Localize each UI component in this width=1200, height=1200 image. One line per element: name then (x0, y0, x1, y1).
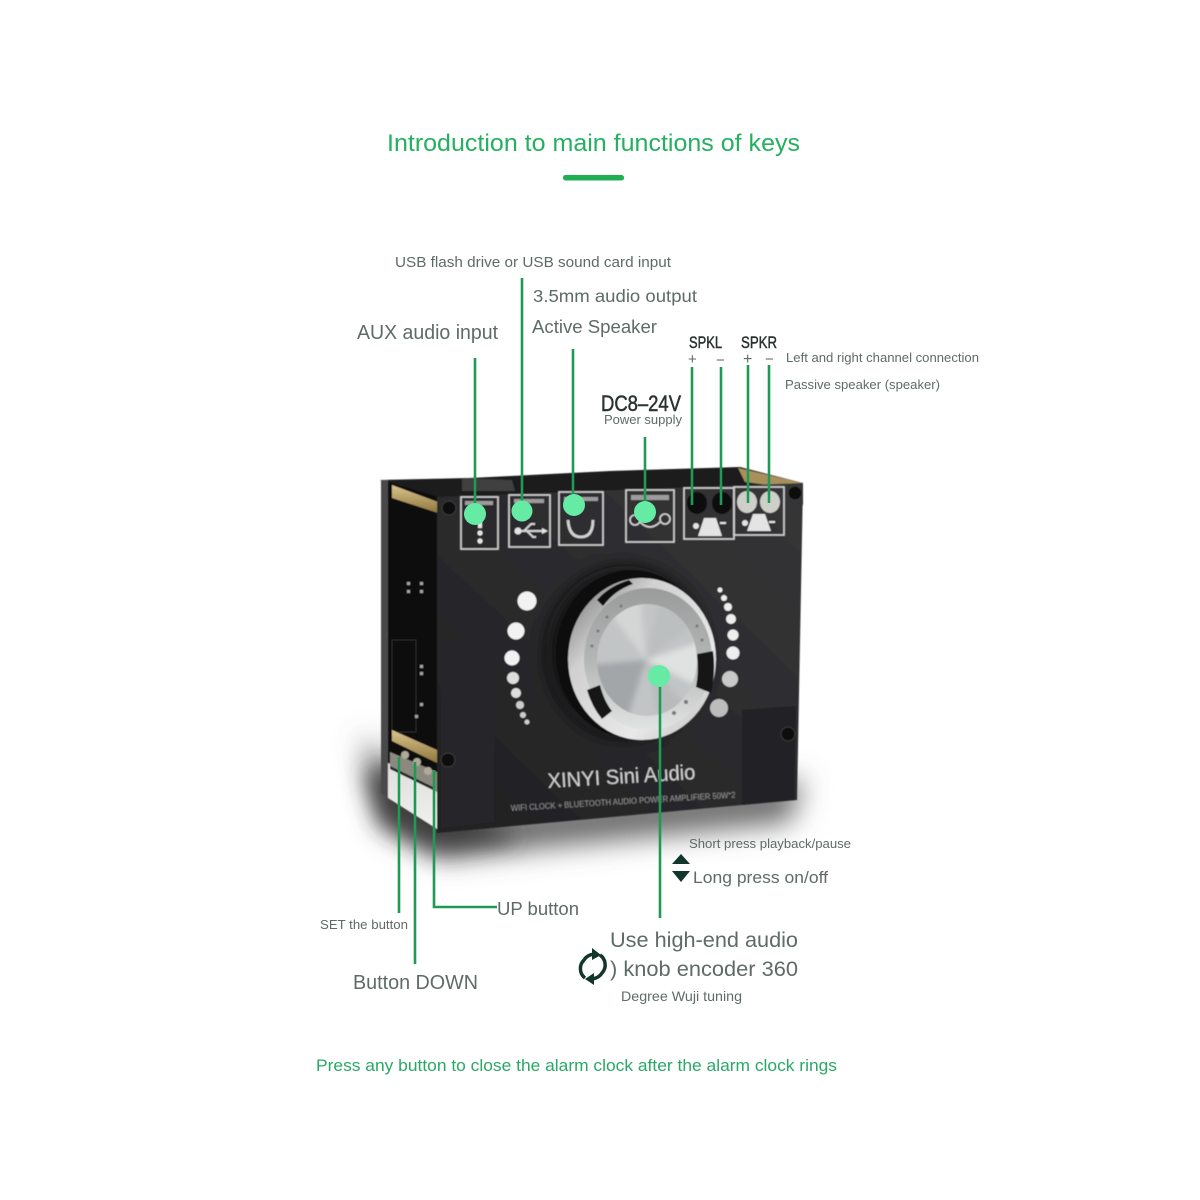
label: knob line 2: ) knob encoder 360 (610, 958, 798, 981)
label: power supply: Power supply (604, 412, 682, 427)
right LED arc (710, 588, 740, 717)
speaker terminals (687, 492, 707, 514)
label: DC voltage: DC8–24V (601, 391, 681, 416)
label: active speaker: Active Speaker (532, 317, 657, 337)
panel screws (441, 486, 802, 767)
label: knob line 3: Degree Wuji tuning (621, 988, 742, 1004)
footer note: Press any button to close the alarm clock after the alarm clock rings (316, 1056, 837, 1075)
rear top edge with connectors (380, 467, 803, 515)
label: knob line 1: Use high-end audio (610, 929, 798, 952)
label: short press: Short press playback/pause (689, 836, 851, 851)
label: long press: Long press on/off (693, 869, 828, 887)
brand text: XINYI Sini Audio (547, 761, 696, 793)
speaker polarity marks: − (765, 351, 774, 368)
label: AUX audio input: AUX audio input (357, 322, 498, 344)
label: UP button: UP button (497, 899, 579, 919)
label: SET button: SET the button (320, 917, 408, 932)
label: passive speaker: Passive speaker (speaker) (785, 378, 940, 392)
port icons (461, 487, 784, 549)
title: Introduction to main functions of keys (387, 130, 800, 157)
title underline (563, 175, 624, 180)
icon: up and down arrows (672, 854, 690, 882)
speaker polarity marks: + (688, 351, 697, 368)
icon: rotate arrows (580, 948, 605, 985)
label: SPKL: SPKL (689, 333, 722, 352)
volume knob (546, 566, 716, 740)
callout leader lines (399, 278, 769, 964)
side circuit board (382, 480, 438, 790)
panel subtitle: WIFI CLOCK + BLUETOOTH AUDIO POWER AMPLIFIER 50W*2 (511, 791, 736, 813)
brass rods (392, 485, 438, 513)
label: button DOWN: Button DOWN (353, 972, 478, 994)
side white base (388, 763, 437, 829)
speaker polarity marks: + (743, 351, 752, 368)
left LED arc (504, 592, 536, 724)
label: 3.5mm audio output: 3.5mm audio output (533, 286, 697, 306)
front panel (437, 483, 803, 833)
label: channel connection: Left and right channel connection (786, 351, 979, 365)
speaker polarity marks (688, 351, 774, 369)
label: SPKR: SPKR (741, 333, 777, 352)
label: USB input: USB flash drive or USB sound card input (395, 255, 671, 271)
device: amplifier board photo (362, 467, 804, 858)
device drop shadow (362, 735, 804, 858)
callout dots (464, 494, 670, 687)
infographic canvas (317, 134, 978, 1074)
speaker polarity marks: − (716, 352, 725, 369)
side buttons (401, 751, 432, 775)
device body (380, 467, 803, 833)
